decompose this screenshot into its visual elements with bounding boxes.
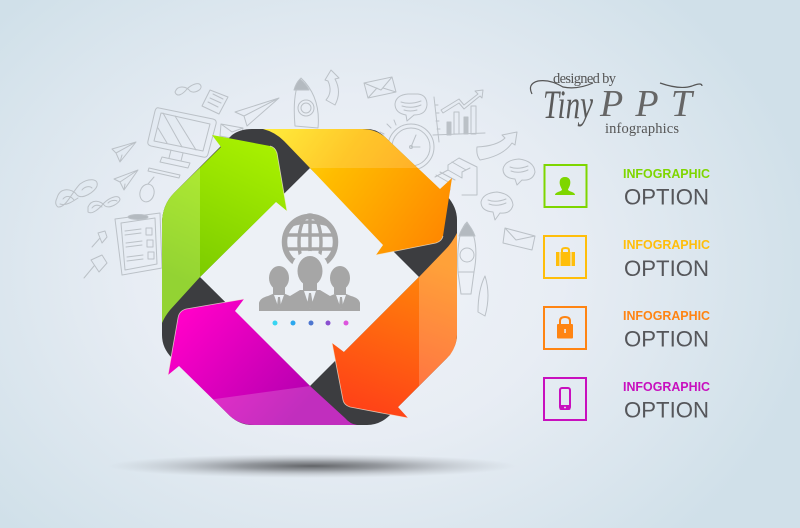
doodle: speech — [395, 94, 427, 121]
centre icon: globe and business people — [259, 215, 360, 326]
logo: designed by Tiny PPT infographics: PPT — [599, 83, 695, 125]
doodle: plane and envelope — [220, 98, 279, 140]
icon: business people — [259, 256, 360, 311]
option 1: green: OPTION — [624, 184, 709, 210]
logo: designed by Tiny PPT infographics: designed by — [553, 71, 617, 87]
icon: globe — [284, 215, 336, 269]
logo: designed by Tiny PPT infographics: infographics — [605, 121, 679, 137]
option 3: orange: OPTION — [624, 326, 709, 352]
label: INFOGRAPHIC — [623, 167, 710, 181]
option 4: magenta — [544, 378, 710, 422]
doodle: curved arrow right — [477, 132, 517, 160]
logo: designed by Tiny PPT infographics — [530, 71, 702, 137]
doodle icons background — [56, 70, 535, 316]
option 2: yellow: OPTION — [624, 256, 709, 281]
arrow: magenta — [168, 299, 357, 425]
centre diamond — [200, 168, 419, 386]
label: INFOGRAPHIC — [623, 380, 710, 394]
doodle: envelope right — [503, 228, 535, 250]
dark octagon backing — [162, 129, 457, 425]
arrow: green — [162, 135, 287, 323]
doodle: bar chart — [433, 90, 485, 142]
floor shadow — [107, 454, 517, 478]
doodle: clipboard — [115, 213, 162, 275]
icon box: phone — [544, 378, 586, 420]
doodle: speech bubbles — [481, 159, 535, 220]
halo behind central head — [291, 251, 329, 293]
doodle: mouse — [138, 177, 156, 204]
icon box: person — [544, 165, 586, 207]
option 4: magenta: OPTION — [624, 398, 709, 422]
arrow: yellow — [263, 129, 452, 255]
logo: designed by Tiny PPT infographics: Tiny — [543, 82, 593, 127]
main octagon cycle graphic — [150, 125, 460, 430]
doodle: envelope — [364, 77, 396, 98]
label: INFOGRAPHIC — [623, 238, 710, 252]
icon box: briefcase — [544, 236, 586, 278]
label: INFOGRAPHIC — [623, 309, 710, 323]
doodle: infinity loops — [56, 84, 201, 213]
doodle: note — [202, 90, 228, 114]
option 2: yellow — [544, 236, 710, 281]
option 1: green — [544, 165, 710, 210]
doodle: monitor — [148, 108, 216, 178]
arrow edge highlights — [168, 146, 443, 418]
doodle: paper planes — [112, 142, 138, 190]
pagination dots — [272, 320, 348, 326]
icon box: padlock — [544, 307, 586, 349]
arrow: orange — [332, 233, 457, 418]
option 3: orange — [544, 307, 710, 352]
doodle: rocket right — [458, 222, 488, 316]
doodle: clock — [380, 120, 434, 170]
doodle: rocket top — [294, 78, 318, 128]
doodle: pins — [84, 231, 107, 278]
doodle: stairs — [435, 158, 477, 195]
doodle: curved arrow up — [325, 70, 339, 105]
